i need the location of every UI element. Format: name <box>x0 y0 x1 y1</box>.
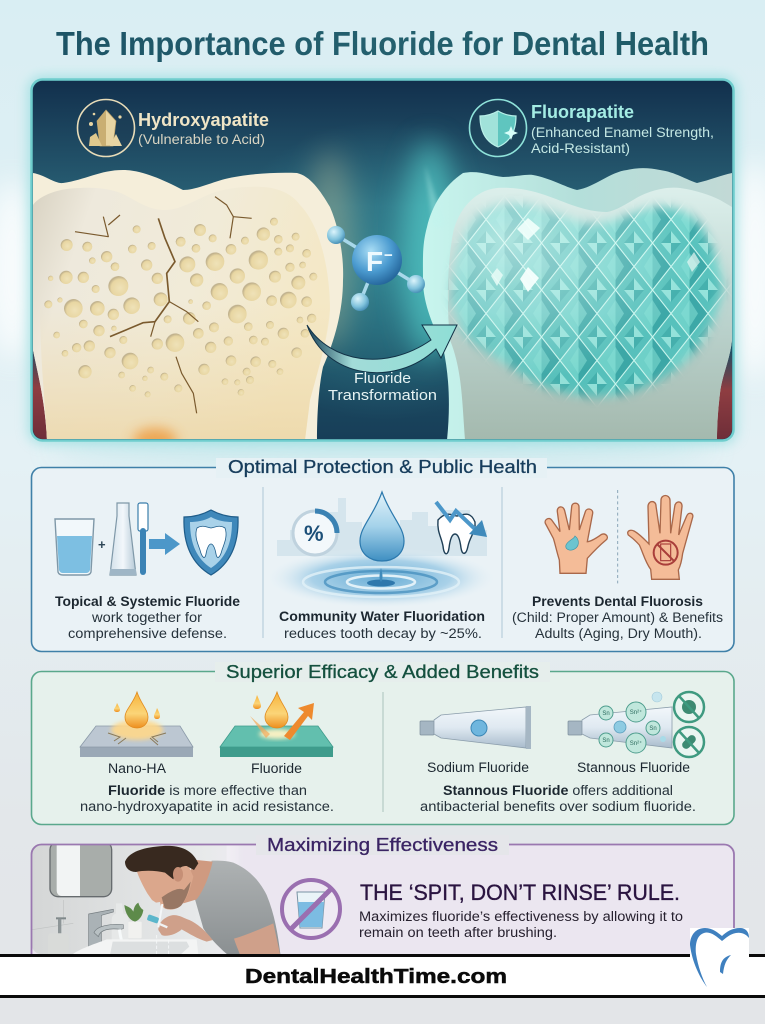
ear <box>173 867 183 882</box>
topical text <box>55 594 241 641</box>
fluorapatite label: (Enhanced Enamel Strength, <box>531 124 714 140</box>
fluoride type labels: Stannous Fluoride <box>577 760 690 775</box>
panel: superior efficacy and added benefits <box>32 662 734 824</box>
icon: stannous fluoride tube with bacteria badges: Sn <box>649 726 657 732</box>
spit rule text <box>359 909 683 940</box>
plant and pot <box>124 903 143 922</box>
right tooth glow <box>402 140 458 360</box>
bottle behind <box>112 904 118 939</box>
nano text <box>80 783 334 814</box>
fluorapatite label: Fluorapatite <box>531 102 634 122</box>
neck <box>183 860 213 903</box>
heading: Maximizing Effectiveness <box>267 835 498 855</box>
spit rule text: remain on teeth after brushing. <box>359 925 557 940</box>
fluorosis text: Prevents Dental Fluorosis <box>532 594 703 609</box>
transformation label: Transformation <box>328 387 437 404</box>
icon: nano-HA plate with drops <box>80 692 193 757</box>
nano labels <box>108 761 302 776</box>
stannous text: antibacterial benefits over sodium fluoride. <box>420 799 696 814</box>
fluorosis text <box>512 594 723 641</box>
fluoride type labels <box>427 760 690 775</box>
transformation label: Fluoride <box>354 370 411 387</box>
upper arm <box>234 923 281 957</box>
topical text: comprehensive defense. <box>68 626 227 641</box>
nano text: Fluoride is more effective than <box>108 783 307 798</box>
icon: stannous fluoride tube with bacteria badges <box>568 692 704 757</box>
icon: hands <box>545 490 693 583</box>
icon: water drop, skyline, percent, tooth decline: % <box>304 521 324 546</box>
transformation arrow <box>307 325 457 373</box>
hair <box>125 846 198 879</box>
nano labels: Fluoride <box>251 761 302 776</box>
fluoride type labels: Sodium Fluoride <box>427 760 529 775</box>
fluorosis text: (Child: Proper Amount) & Benefits <box>512 610 723 625</box>
enamel pits <box>44 218 317 397</box>
icon: stannous fluoride tube with bacteria badges: Sn²⁺ <box>630 740 642 747</box>
icon: glass, toothpaste, toothbrush, shield: + <box>98 537 106 552</box>
title: The Importance of Fluoride for Dental Health <box>56 25 709 62</box>
topical text: work together for <box>91 610 203 625</box>
hydroxyapatite label: Hydroxyapatite <box>138 110 269 130</box>
nano text: nano-hydroxyapatite in acid resistance. <box>80 799 334 814</box>
left gum <box>33 352 47 439</box>
hydroxyapatite label: (Vulnerable to Acid) <box>138 131 265 147</box>
sink <box>72 939 198 955</box>
panel: maximizing effectiveness <box>30 837 735 954</box>
icon: water drop, skyline, percent, tooth decline <box>266 492 496 608</box>
toothbrush <box>158 904 162 927</box>
footer band <box>0 954 765 998</box>
transformation label <box>328 370 437 404</box>
cracks <box>75 197 252 413</box>
icon: glass, toothpaste, toothbrush, shield <box>55 503 238 575</box>
panel: optimal protection and public health <box>32 457 734 652</box>
fluorapatite icon <box>470 100 526 156</box>
light ray <box>425 170 438 216</box>
mirror <box>50 842 112 897</box>
right gum <box>717 353 732 439</box>
photo: man brushing teeth <box>30 842 281 957</box>
faucet <box>89 909 113 950</box>
soap dispenser <box>56 917 66 919</box>
icon: sodium fluoride tube <box>420 706 531 749</box>
heading: Optimal Protection & Public Health <box>228 457 537 477</box>
hydroxyapatite icon <box>78 100 134 156</box>
left tooth glow <box>306 150 354 350</box>
fluorapatite label <box>531 102 714 156</box>
fluoride ion molecule <box>327 226 425 311</box>
bathroom wall <box>32 846 184 954</box>
fluorosis text: Adults (Aging, Dry Mouth). <box>535 626 702 641</box>
left tooth <box>33 170 343 452</box>
icon: no rinse glass <box>282 880 340 938</box>
right tooth <box>423 168 735 440</box>
spit rule text: Maximizes fluoride’s effectiveness by allowing it to <box>359 909 683 924</box>
beard <box>162 882 191 909</box>
icon: stannous fluoride tube with bacteria badges: Sn²⁺ <box>630 709 642 716</box>
forearm and hand <box>158 915 213 942</box>
heading: Superior Efficacy & Added Benefits <box>226 662 539 682</box>
water text <box>279 609 485 641</box>
nano labels: Nano-HA <box>108 761 166 776</box>
panel: hero tooth transformation <box>28 76 737 452</box>
stannous text <box>420 783 696 814</box>
icon: fluoride plate with deflected drop <box>220 692 333 757</box>
spit rule heading: THE ‘SPIT, DON’T RINSE’ RULE. <box>360 880 680 905</box>
icon: stannous fluoride tube with bacteria badges: Sn <box>602 738 610 744</box>
icon: stannous fluoride tube with bacteria badges: Sn <box>602 711 610 717</box>
fluorapatite lattice <box>446 198 730 404</box>
shirt <box>195 861 281 957</box>
stannous text: Stannous Fluoride offers additional <box>443 783 673 798</box>
topical text: Topical & Systemic Fluoride <box>55 594 241 609</box>
water text: Community Water Fluoridation <box>279 609 485 624</box>
footer website: DentalHealthTime.com <box>245 966 507 988</box>
footer tooth logo <box>690 928 749 987</box>
face <box>137 862 193 910</box>
hydroxyapatite label <box>138 110 269 147</box>
fluoride ion molecule: − <box>384 247 393 264</box>
water text: reduces tooth decay by ~25%. <box>284 626 482 641</box>
fluoride ion molecule: F <box>366 246 383 277</box>
fluorapatite label: Acid-Resistant) <box>531 140 630 156</box>
